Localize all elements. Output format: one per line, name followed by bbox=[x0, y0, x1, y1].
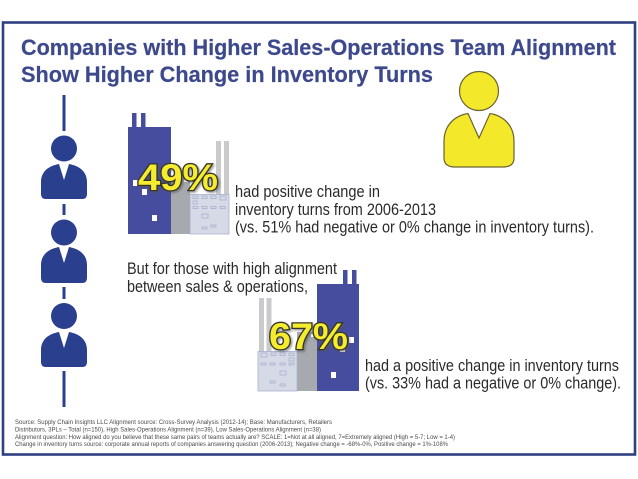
blue tower bbox=[128, 113, 171, 234]
source footnote: Distributors, 3PLs – Total (n=150), High Sales-Operations Alignment (n=39), Low Sales-Operations Alignment (n=38) bbox=[15, 426, 321, 434]
grey chimneys bbox=[216, 141, 229, 195]
source footnote: Alignment question: How aligned do you believe that these same pairs of teams actually are? SCALE: 1=Not at all aligned, 7=Extremely aligned (High = 5-7; Low = 1-4) bbox=[15, 434, 455, 441]
grey middle building bbox=[171, 178, 190, 234]
title bbox=[21, 35, 617, 87]
text block 1: inventory turns from 2006-2013 bbox=[235, 201, 436, 219]
49% label: 49% bbox=[138, 156, 218, 198]
factory graphic 2 with 67% bbox=[258, 270, 359, 391]
grey chimneys bbox=[259, 298, 272, 352]
light building bbox=[258, 352, 297, 391]
windows bbox=[133, 178, 188, 221]
title: Companies with Higher Sales-Operations Team Alignment bbox=[21, 35, 617, 60]
text block 3 bbox=[365, 357, 621, 392]
light building bbox=[190, 194, 229, 234]
source footnote: Source: Supply Chain Insights LLC Alignment source: Cross-Survey Analysis (2012-14); Base: Manufacturers, Retailers bbox=[15, 419, 333, 426]
factory graphic 1 with 49% bbox=[128, 113, 229, 234]
text block 2: But for those with high alignment bbox=[127, 260, 337, 278]
grey middle building bbox=[297, 332, 317, 391]
windows bbox=[293, 334, 354, 378]
text block 1: had positive change in bbox=[235, 183, 380, 201]
source footnote bbox=[15, 419, 455, 448]
67% label: 67% bbox=[269, 315, 348, 357]
text block 1: (vs. 51% had negative or 0% change in inventory turns). bbox=[235, 218, 594, 236]
blue tower bbox=[317, 270, 359, 391]
text block 2: between sales & operations, bbox=[127, 278, 308, 296]
text block 1 bbox=[235, 183, 594, 236]
title: Show Higher Change in Inventory Turns bbox=[21, 62, 433, 87]
source footnote: Change in inventory turns source: corporate annual reports of companies answering question (2006-2013); Negative change = -68%-0%, Positive change = 1%-108% bbox=[15, 441, 448, 448]
icon: yellow person bbox=[444, 72, 514, 167]
icon: blue people chain bbox=[41, 95, 87, 407]
text block 2 bbox=[127, 260, 337, 296]
